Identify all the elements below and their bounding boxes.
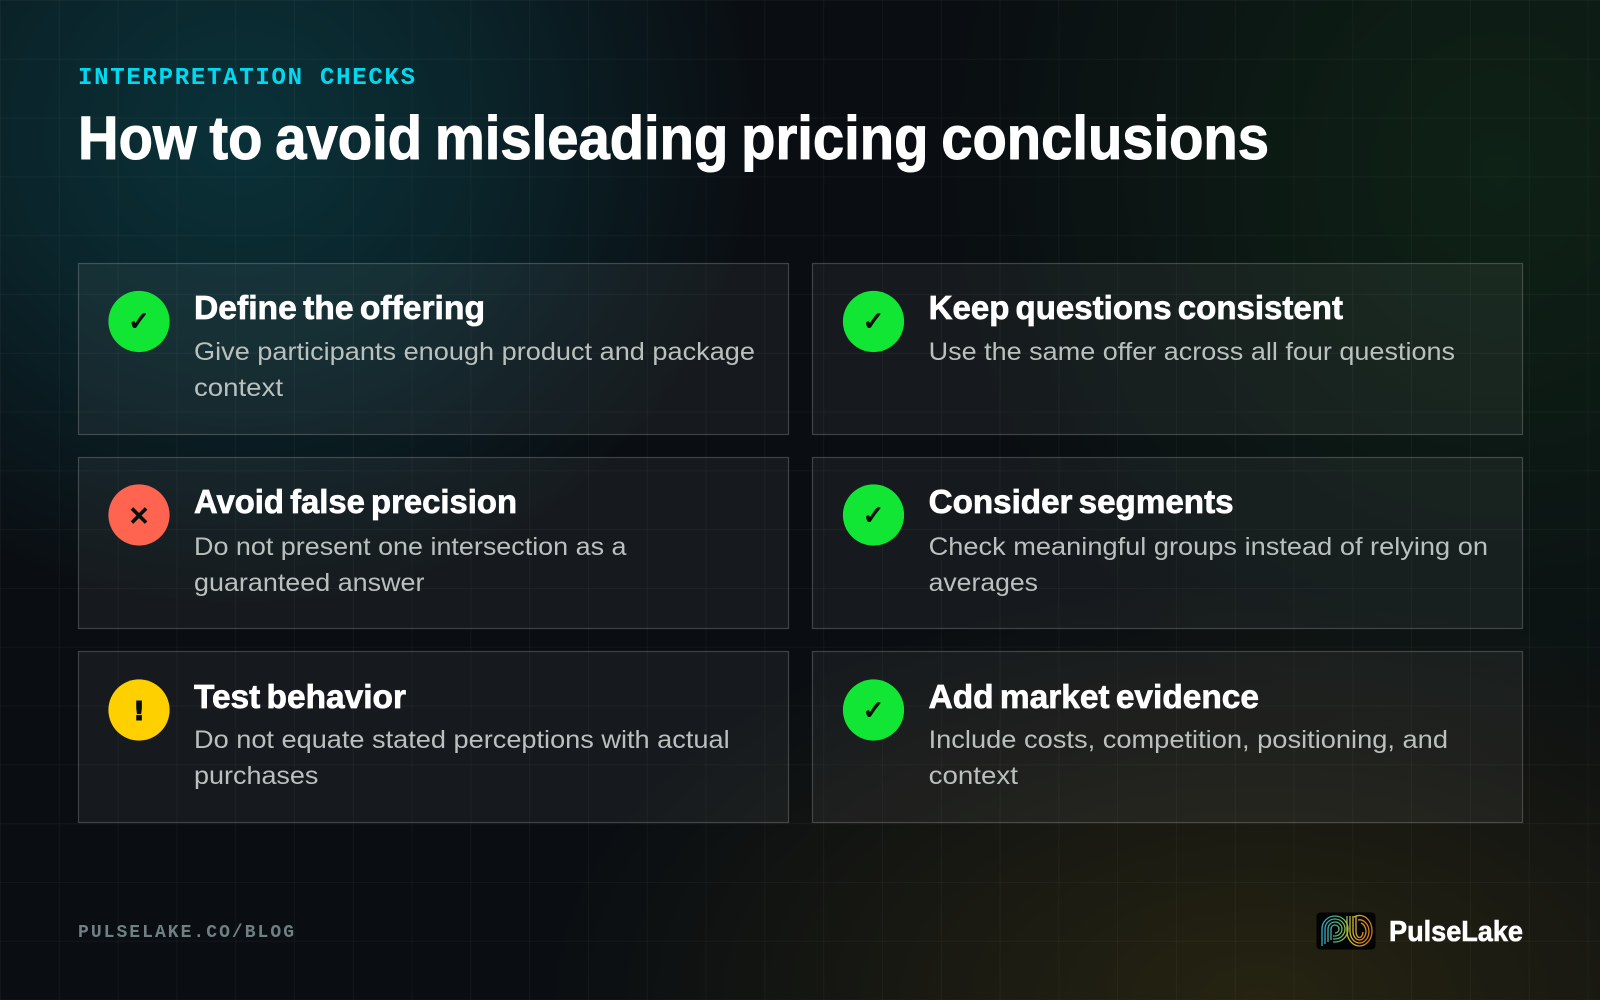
text: avoid false precision description: guaranteed answer xyxy=(194,569,424,597)
text: consider segments description: averages xyxy=(929,569,1038,597)
title: How to avoid misleading pricing conclusions xyxy=(78,104,1269,172)
icon: check xyxy=(108,291,170,352)
text: define the offering description: context xyxy=(194,374,283,402)
footer url: PULSELAKE.CO/BLOG xyxy=(78,923,294,943)
panel: test behavior xyxy=(78,652,788,822)
panel: avoid false precision xyxy=(78,458,788,628)
text: avoid false precision description: Do not present one intersection as a xyxy=(194,533,627,561)
icon: cross: ✕ xyxy=(128,502,150,532)
text: add market evidence description xyxy=(929,726,1448,790)
icon: check xyxy=(843,679,904,741)
icon: check xyxy=(843,291,904,352)
text: add market evidence description: context xyxy=(929,762,1018,790)
logo mark xyxy=(1316,912,1376,950)
text: test behavior description xyxy=(194,726,730,790)
icon: check: ✓ xyxy=(128,307,150,337)
panel: keep questions consistent xyxy=(812,264,1522,434)
text: test behavior description: purchases xyxy=(194,762,318,790)
icon: check: ✓ xyxy=(863,501,884,531)
text: avoid false precision description xyxy=(194,533,627,597)
text: add market evidence description: Include costs, competition, positioning, and xyxy=(929,726,1448,754)
brand name: PulseLake xyxy=(1389,916,1523,948)
heading: consider segments: Consider segments xyxy=(929,483,1234,520)
text: define the offering description: Give participants enough product and package xyxy=(194,338,755,366)
text: consider segments description: Check meaningful groups instead of relying on xyxy=(929,533,1488,561)
icon: check: ✓ xyxy=(863,307,884,337)
panel: consider segments xyxy=(812,458,1522,628)
icon: warning xyxy=(108,679,170,741)
icon: cross xyxy=(108,484,170,546)
heading: avoid false precision: Avoid false precision xyxy=(194,483,517,520)
text: define the offering description xyxy=(194,338,755,402)
heading: test behavior: Test behavior xyxy=(194,678,406,715)
icon: check xyxy=(843,484,904,546)
panel: add market evidence xyxy=(812,652,1522,822)
text: test behavior description: Do not equate stated perceptions with actual xyxy=(194,726,730,754)
heading: define the offering: Define the offering xyxy=(194,289,485,326)
text: consider segments description xyxy=(929,533,1488,597)
heading: keep questions consistent: Keep questions consistent xyxy=(929,289,1343,326)
icon: warning: ! xyxy=(133,697,145,727)
heading: add market evidence: Add market evidence xyxy=(929,678,1259,715)
eyebrow: interpretation checks: INTERPRETATION CHECKS xyxy=(78,65,415,92)
icon: check: ✓ xyxy=(863,696,884,726)
text: keep questions consistent description: Use the same offer across all four questions xyxy=(929,338,1455,366)
panel: define the offering xyxy=(78,264,788,434)
